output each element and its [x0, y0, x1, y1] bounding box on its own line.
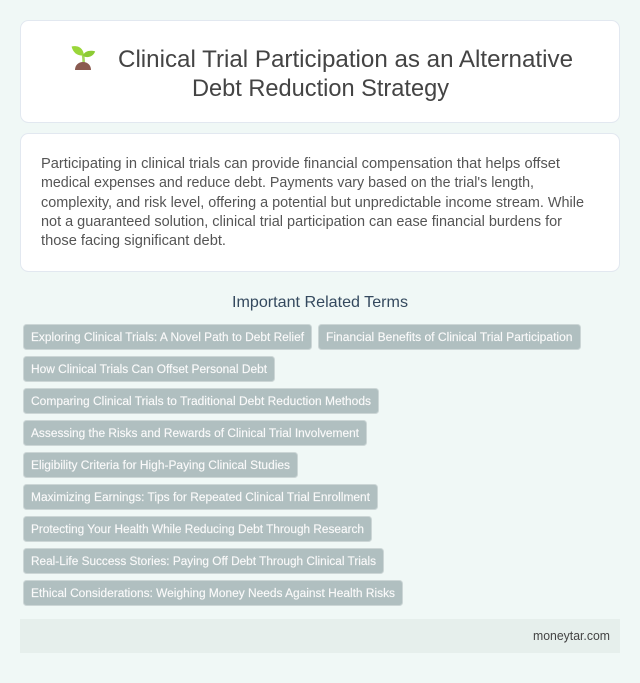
tag 8 [24, 516, 372, 542]
tag 3 [24, 356, 274, 382]
tag 2: Financial Benefits of Clinical Trial Participation [326, 330, 572, 344]
tag 6 [24, 452, 298, 478]
tag 6: Eligibility Criteria for High-Paying Clinical Studies [31, 458, 290, 472]
text block: description: medical expenses and reduce debt. Payments vary based on the trial's length, [41, 175, 534, 191]
panel: description card [20, 134, 620, 272]
title: Debt Reduction Strategy [192, 75, 449, 102]
tag 10 [24, 580, 402, 606]
footer [20, 619, 620, 653]
panel: title card [20, 20, 620, 122]
tag 1 [24, 324, 312, 350]
tag 2 [318, 324, 580, 350]
text block: description: complexity, and risk level, offering a potential but unpredictable income stream. While [41, 195, 584, 211]
tag 7: Maximizing Earnings: Tips for Repeated Clinical Trial Enrollment [31, 490, 371, 504]
text block: description: not a guaranteed solution, clinical trial participation can ease financial burdens for [41, 214, 562, 230]
footer source text: moneytar.com [533, 628, 610, 643]
heading: important related terms: Important Related Terms [232, 294, 408, 311]
text block: description: those facing significant debt. [41, 233, 226, 249]
tag 10: Ethical Considerations: Weighing Money Needs Against Health Risks [31, 586, 395, 600]
panel: related terms tags [24, 324, 580, 606]
tag 4: Comparing Clinical Trials to Traditional Debt Reduction Methods [31, 394, 371, 408]
tag 5 [24, 420, 366, 446]
text block: description: Participating in clinical trials can provide financial compensation that helps offset [41, 156, 560, 172]
tag 8: Protecting Your Health While Reducing Debt Through Research [31, 522, 364, 536]
tag 4 [24, 388, 378, 414]
tag 7 [24, 484, 378, 510]
title [118, 46, 573, 102]
text block: description [41, 156, 584, 249]
tag 9: Real-Life Success Stories: Paying Off Debt Through Clinical Trials [31, 554, 376, 568]
tag 9 [24, 548, 384, 574]
icon: seedling [72, 46, 95, 70]
tag 1: Exploring Clinical Trials: A Novel Path to Debt Relief [31, 330, 305, 344]
tag 5: Assessing the Risks and Rewards of Clinical Trial Involvement [31, 426, 360, 440]
title: Clinical Trial Participation as an Alternative [118, 46, 573, 73]
tag 3: How Clinical Trials Can Offset Personal Debt [31, 362, 268, 376]
